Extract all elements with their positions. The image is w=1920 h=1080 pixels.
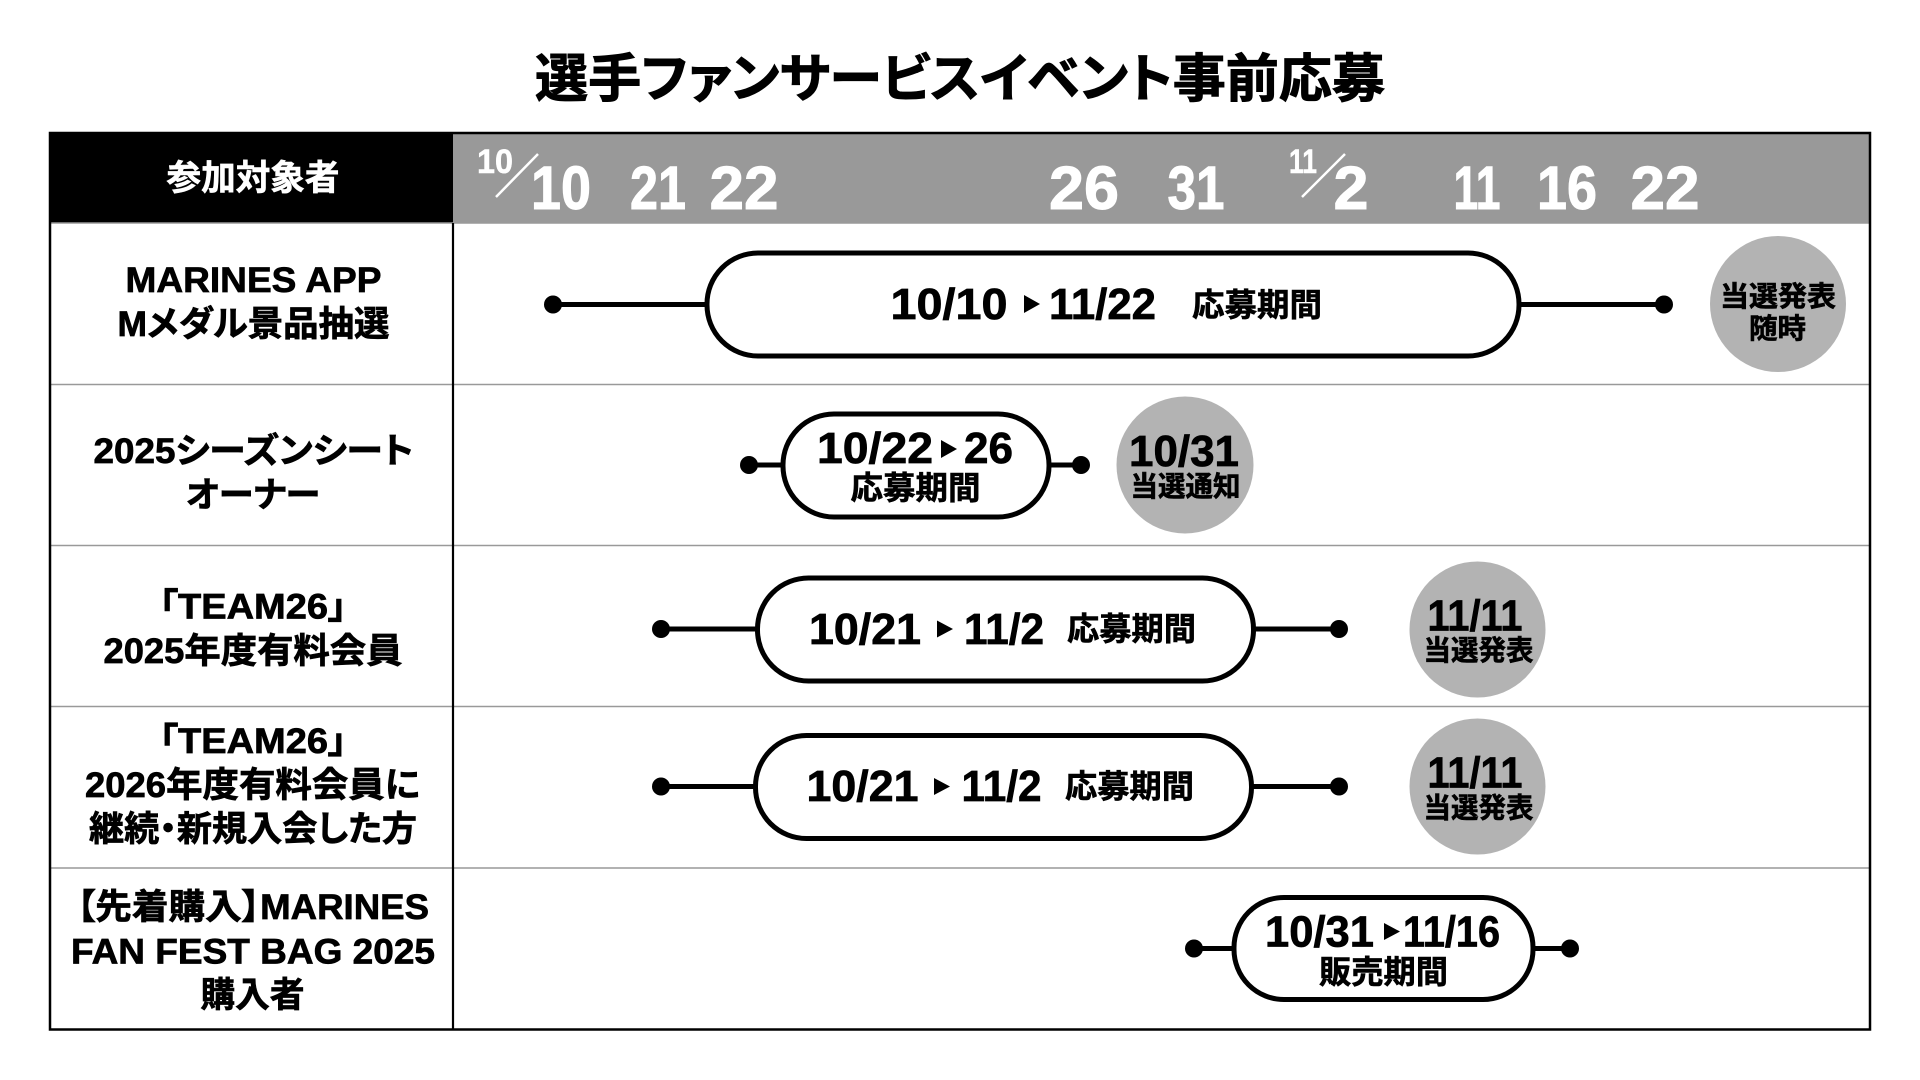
row 3 result badge: 当選発表 xyxy=(1424,635,1534,666)
row 2 label xyxy=(94,431,414,515)
row 5 timeline xyxy=(1185,898,1579,1000)
row 4 result badge xyxy=(1410,718,1546,854)
row 5: MARINES FAN FEST BAG 2025 purchasers xyxy=(71,888,1579,1015)
row 2 timeline: 10/22 xyxy=(817,424,933,473)
header: date axis: 11 xyxy=(1289,143,1317,181)
header: date axis: 22 xyxy=(1630,154,1700,222)
header: date axis: 21 xyxy=(630,154,686,222)
header: date axis: 2 xyxy=(1334,154,1368,222)
row 3 timeline xyxy=(652,578,1348,681)
row 4 label: 継続・新規入会した方 xyxy=(89,810,417,849)
row 5 timeline: 10/31 xyxy=(1265,908,1374,956)
header: date axis: 22 xyxy=(710,154,778,222)
row 3 result badge xyxy=(1410,562,1546,698)
row 3 timeline: 10/21 xyxy=(809,605,921,654)
row 2 timeline xyxy=(740,414,1090,517)
row 1 timeline: 10/10 xyxy=(890,280,1008,329)
row 2 result badge: 10/31 xyxy=(1129,427,1239,476)
header: date axis: 16 xyxy=(1537,154,1597,222)
row 5 timeline: 11/16 xyxy=(1403,908,1500,956)
row 5 label: 購入者 xyxy=(200,976,304,1015)
row 4 timeline: 応募期間 xyxy=(1065,768,1194,804)
row 2 result badge: 当選通知 xyxy=(1130,471,1240,502)
row 1 timeline xyxy=(544,253,1673,356)
row 3 label xyxy=(104,588,402,671)
row 2: season seat owner xyxy=(94,396,1254,534)
row 3 label: 2025年度有料会員 xyxy=(104,632,402,671)
row 3 timeline: 11/2 xyxy=(964,605,1044,654)
row 4 label: 2026年度有料会員に xyxy=(85,766,420,805)
row 4 timeline: 11/2 xyxy=(962,762,1042,811)
row 1 label xyxy=(118,261,390,344)
row 1 label: MARINES APP xyxy=(126,261,382,300)
row 4 result badge: 11/11 xyxy=(1428,748,1522,798)
row 2 label: オーナー xyxy=(186,476,320,515)
row 4: TEAM26 2026 paid members xyxy=(85,718,1546,854)
schedule table xyxy=(50,133,1870,1030)
header: date axis: 11 xyxy=(1454,154,1500,222)
row 3 label: 「TEAM26」 xyxy=(159,588,347,626)
row 4 label: 「TEAM26」 xyxy=(159,722,347,761)
row 4 timeline xyxy=(652,736,1348,838)
row 2 label: 2025シーズンシート xyxy=(94,431,414,471)
row 2 result badge xyxy=(1116,396,1254,534)
header: date axis xyxy=(453,133,1870,223)
row 5 timeline: 販売期間 xyxy=(1319,954,1448,990)
row 1: MARINES APP xyxy=(118,236,1846,372)
row 1 timeline: 11/22 xyxy=(1049,280,1156,329)
title: 選手ファンサービスイベント事前応募 xyxy=(535,51,1385,109)
header: date axis: 10 xyxy=(531,154,591,222)
row 3: TEAM26 2025 paid members xyxy=(104,562,1546,698)
row 5 label: 【先着購入】MARINES xyxy=(77,888,429,927)
row 3 timeline: 応募期間 xyxy=(1067,611,1196,647)
header: target column xyxy=(50,133,453,223)
row 1 result badge: 随時 xyxy=(1749,313,1806,344)
row 5 label: FAN FEST BAG 2025 xyxy=(71,932,435,972)
row 2 timeline: 26 xyxy=(964,424,1013,473)
row 4 result badge: 当選発表 xyxy=(1424,792,1534,824)
row 1 timeline: 応募期間 xyxy=(1192,287,1322,323)
header: date axis: 26 xyxy=(1049,154,1119,222)
row 1 result badge xyxy=(1710,236,1846,372)
header: date axis: 10 xyxy=(477,143,513,181)
row 1 label: Mメダル景品抽選 xyxy=(118,304,390,344)
row 3 result badge: 11/11 xyxy=(1428,592,1522,640)
row 5 label xyxy=(71,888,435,1015)
header: target column: 参加対象者 xyxy=(166,159,340,198)
row 4 timeline: 10/21 xyxy=(806,762,918,811)
header: date axis: 31 xyxy=(1168,154,1224,222)
row 2 timeline: 応募期間 xyxy=(850,470,980,506)
row 4 label xyxy=(85,722,420,849)
row 1 result badge: 当選発表 xyxy=(1720,281,1836,312)
